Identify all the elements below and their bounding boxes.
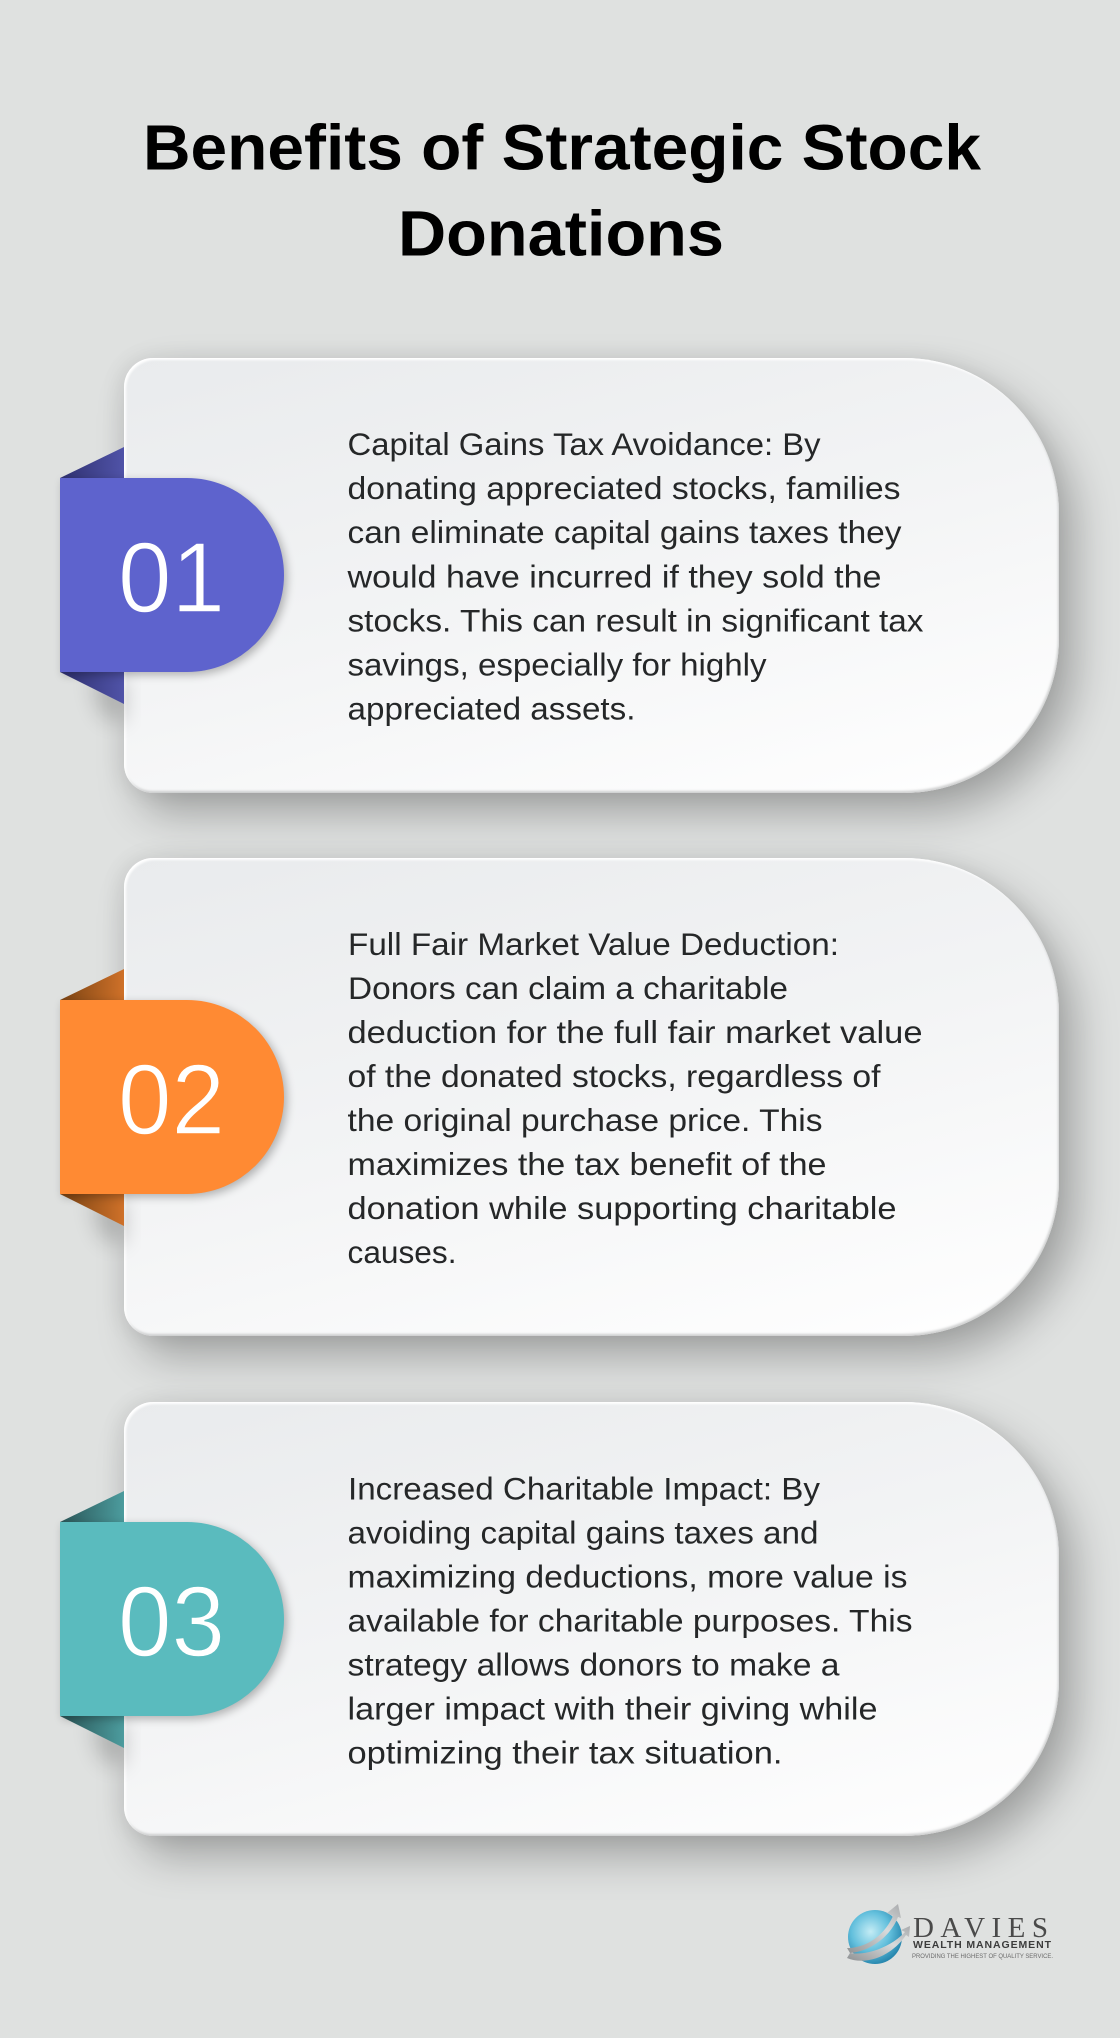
body text: appreciated assets. <box>348 691 636 727</box>
wordmark: DAVIES <box>913 1912 1048 1944</box>
number badge 01: 01 <box>118 522 225 634</box>
body text: savings, especially for highly <box>348 647 767 683</box>
card background <box>124 858 1059 1336</box>
icon: globe with arrows <box>847 1904 910 1964</box>
body text <box>348 926 922 1270</box>
body text: maximizing deductions, more value is <box>348 1558 908 1594</box>
panel: increased charitable impact <box>58 1394 1097 1878</box>
body text <box>346 426 924 727</box>
number badge 01 <box>60 478 284 672</box>
body text: would have incurred if they sold the <box>346 558 882 594</box>
body text: causes. <box>348 1234 456 1270</box>
body text: optimizing their tax situation. <box>348 1734 782 1770</box>
body text: avoiding capital gains taxes and <box>348 1514 818 1550</box>
card background <box>124 358 1059 793</box>
body text: can eliminate capital gains taxes they <box>348 514 902 550</box>
body text: Full Fair Market Value Deduction: <box>348 926 839 962</box>
ribbon folds <box>60 969 134 1248</box>
body text: the original purchase price. This <box>348 1102 822 1138</box>
ribbon folds <box>60 1491 134 1770</box>
body text <box>348 1470 912 1770</box>
title: Benefits of Strategic Stock <box>143 112 981 184</box>
card background <box>124 1402 1059 1836</box>
body text: maximizes the tax benefit of the <box>348 1146 826 1182</box>
ribbon folds <box>60 447 134 726</box>
number badge 02: 02 <box>118 1044 225 1156</box>
body text: larger impact with their giving while <box>348 1690 878 1726</box>
body text: of the donated stocks, regardless of <box>348 1058 881 1094</box>
body text: Increased Charitable Impact: By <box>348 1470 820 1506</box>
title <box>143 112 981 270</box>
body text: Donors can claim a charitable <box>348 970 788 1006</box>
body text: deduction for the full fair market value <box>348 1014 922 1050</box>
panel: full fair market value deduction <box>58 850 1097 1378</box>
title: Donations <box>398 198 724 270</box>
panel: capital gains tax avoidance <box>58 350 1097 835</box>
body text: Capital Gains Tax Avoidance: By <box>348 426 821 462</box>
number badge 03: 03 <box>118 1566 225 1678</box>
body text: strategy allows donors to make a <box>348 1646 840 1682</box>
logo: Davies Wealth Management <box>847 1904 1053 1964</box>
number badge 02 <box>60 1000 284 1194</box>
tagline: PROVIDING THE HIGHEST OF QUALITY SERVICE. <box>912 1953 1053 1960</box>
number badge 03 <box>60 1522 284 1716</box>
body text: stocks. This can result in significant tax <box>348 603 924 639</box>
body text: donating appreciated stocks, families <box>348 470 900 506</box>
wordmark subtitle: WEALTH MANAGEMENT <box>913 1939 1052 1951</box>
body text: available for charitable purposes. This <box>348 1602 912 1638</box>
body text: donation while supporting charitable <box>348 1190 896 1226</box>
